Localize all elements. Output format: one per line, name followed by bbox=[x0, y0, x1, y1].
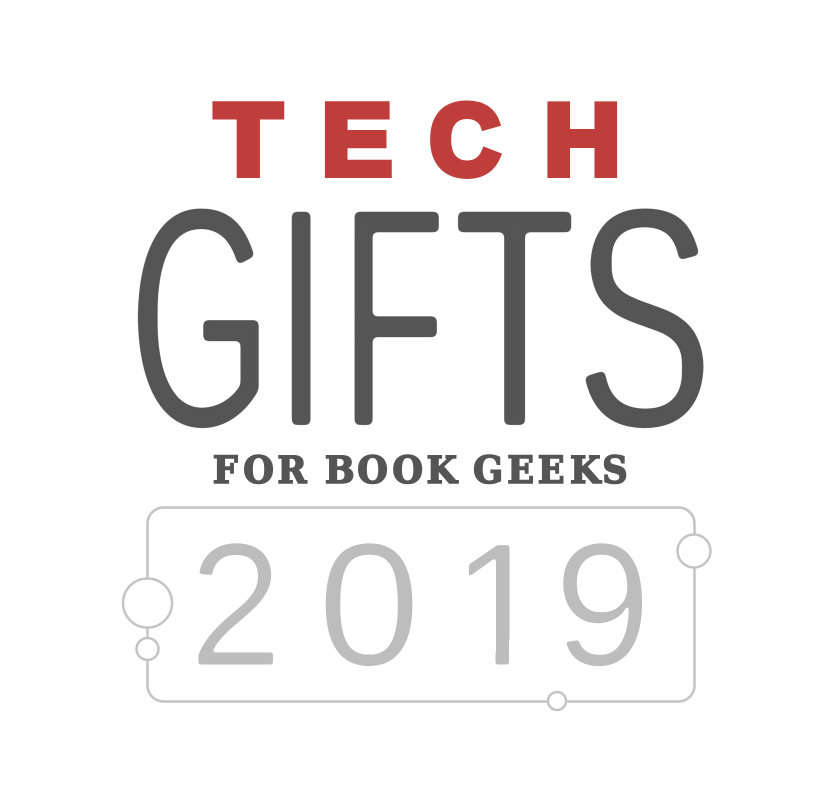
circle: small left node bbox=[136, 638, 158, 660]
heading: TECH: H bbox=[544, 83, 621, 196]
heading: TECH: E bbox=[322, 83, 392, 196]
heading: GIFTS: T bbox=[455, 142, 574, 494]
year: 2019: 9 bbox=[554, 508, 651, 703]
heading: TECH bbox=[215, 83, 621, 197]
heading: GIFTS: F bbox=[342, 143, 444, 494]
year: 2019: 0 bbox=[318, 508, 421, 703]
circle: large left node bbox=[123, 578, 172, 628]
year: 2019: 2 bbox=[189, 508, 282, 703]
heading: TECH: T bbox=[215, 84, 282, 197]
infographic title lockup bbox=[122, 100, 712, 712]
year: 2019: 1 bbox=[451, 508, 548, 703]
circle: right node bbox=[678, 534, 710, 568]
heading: TECH: C bbox=[430, 84, 500, 197]
circle: bottom node bbox=[548, 692, 566, 710]
year: 2019 bbox=[198, 543, 642, 666]
subheading: FOR BOOK GEEKS: FOR BOOK GEEKS bbox=[0, 448, 628, 492]
heading: GIFTS: I bbox=[277, 142, 325, 494]
heading: GIFTS: S bbox=[576, 143, 712, 494]
heading: GIFTS: G bbox=[130, 142, 271, 494]
frame with circles bbox=[123, 508, 710, 710]
heading: GIFTS bbox=[130, 142, 712, 494]
